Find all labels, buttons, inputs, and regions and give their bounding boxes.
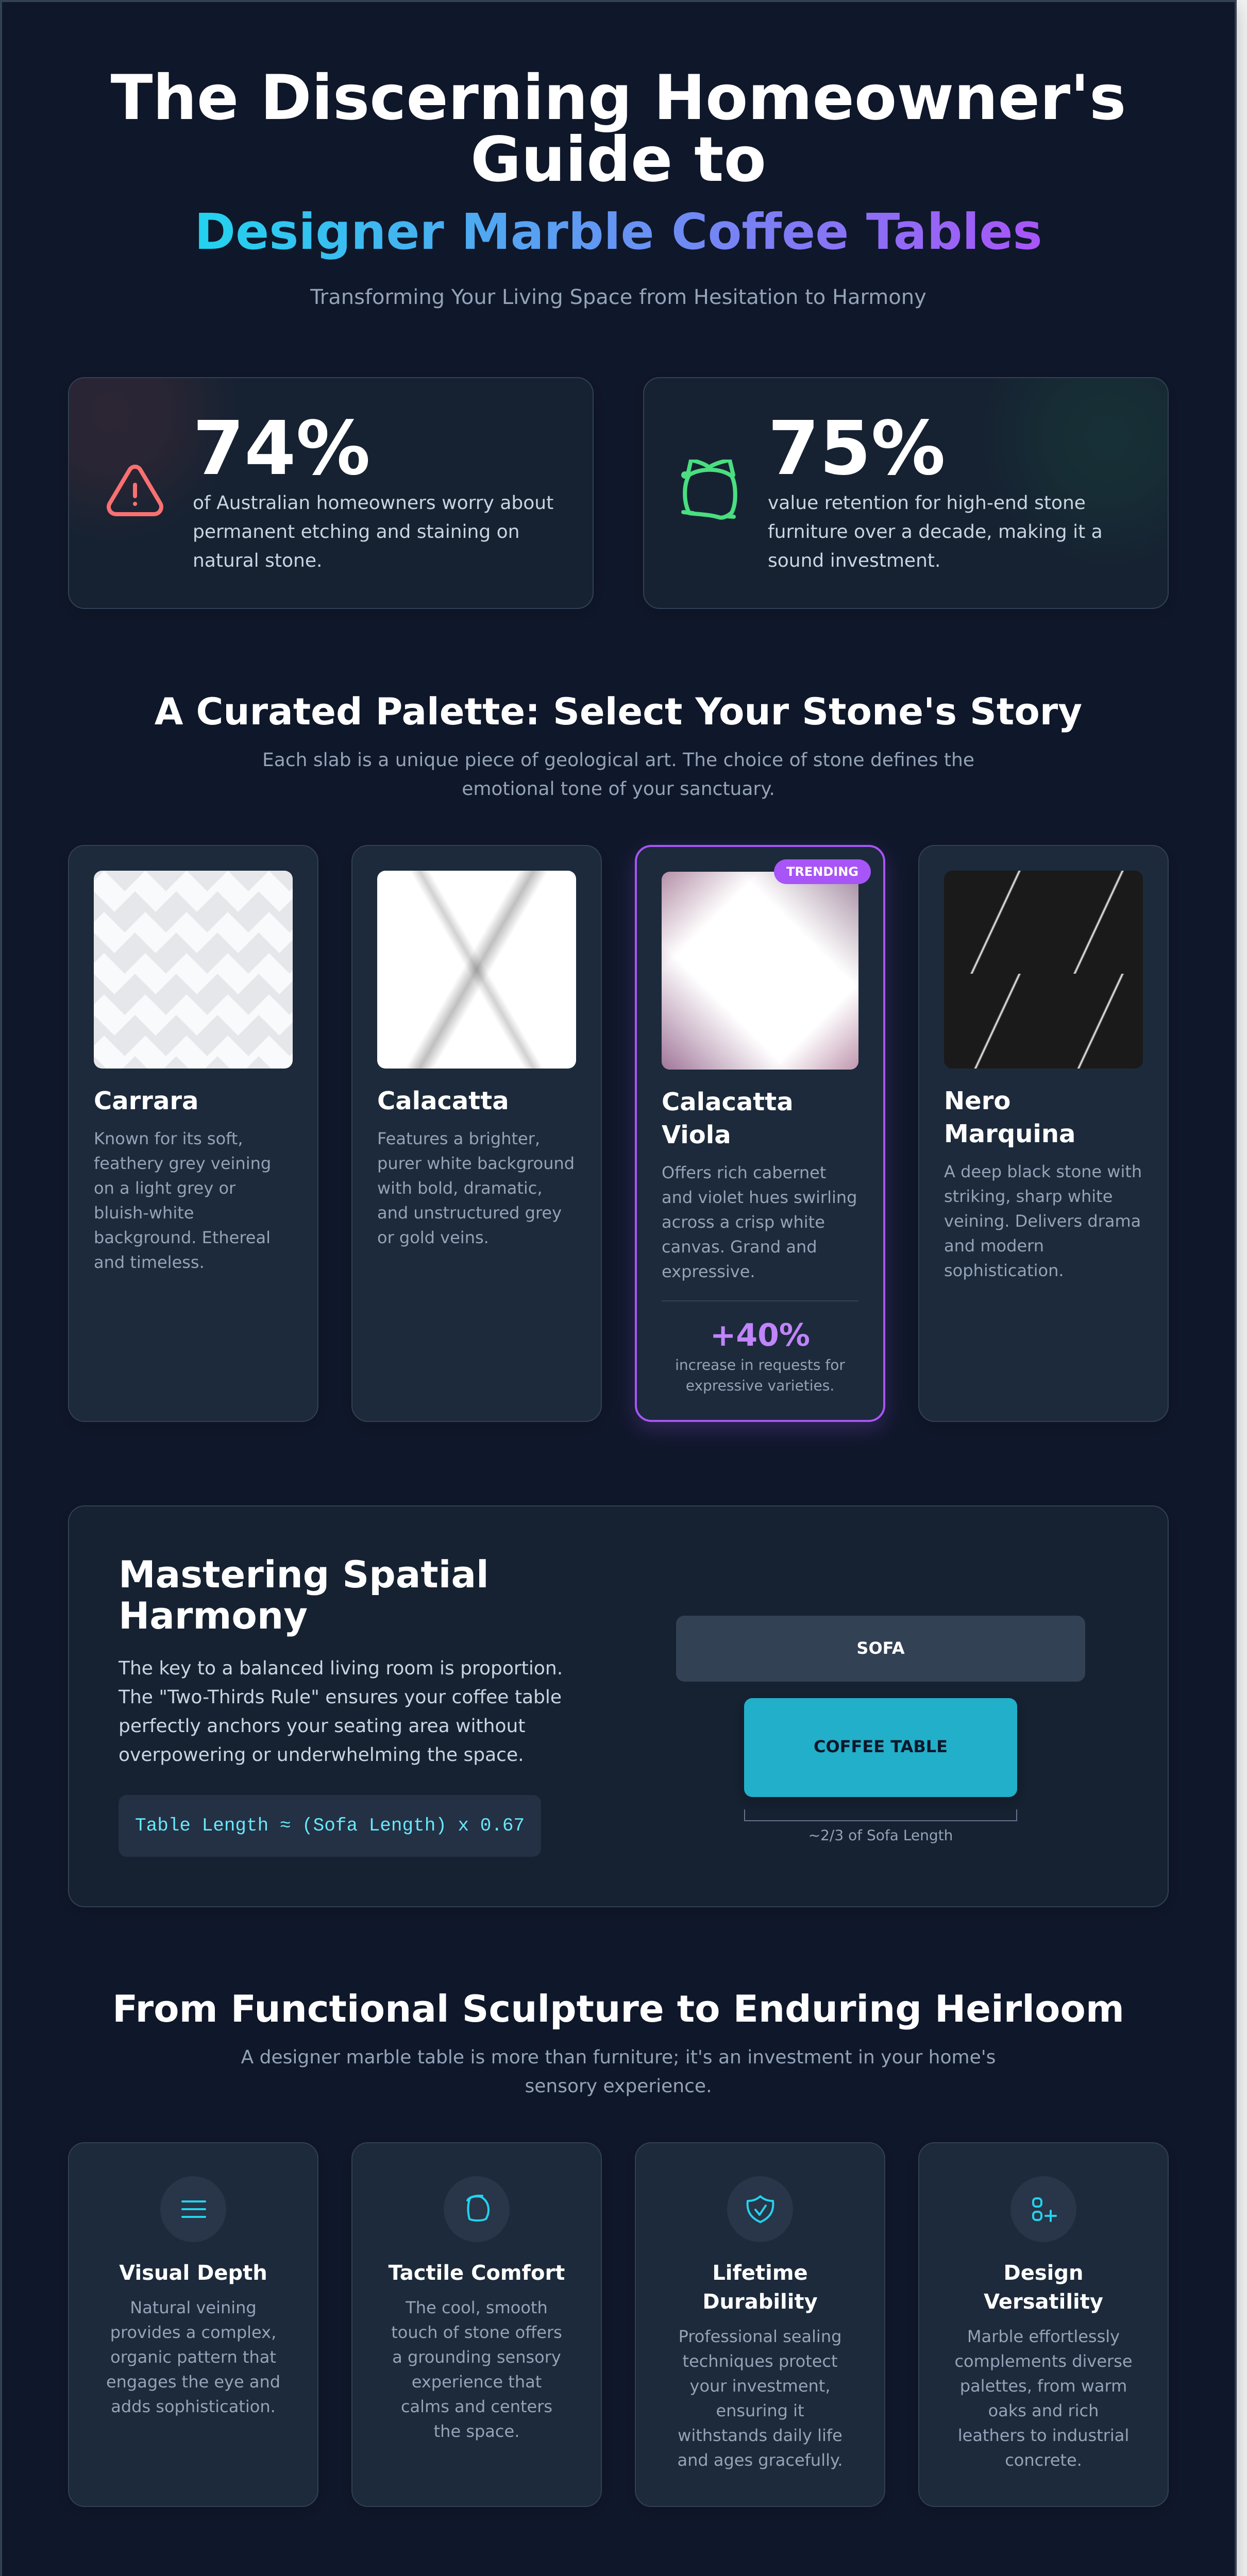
- feature text: your investment,: [689, 2376, 831, 2396]
- feature text: engages the eye and: [106, 2372, 280, 2392]
- stone description: expressive.: [662, 1262, 755, 1281]
- icon: green alarm shape: [683, 460, 735, 518]
- trending badge: TRENDING: [786, 865, 858, 879]
- body text: The "Two-Thirds Rule" ensures your coffee table: [118, 1687, 562, 1708]
- icon: smooth stone: [467, 2196, 488, 2221]
- body text: overpowering or underwhelming the space.: [119, 1744, 524, 1766]
- card background: [635, 2143, 885, 2506]
- stone name: Marquina: [944, 1120, 1075, 1148]
- feature text: Marble effortlessly: [967, 2327, 1120, 2346]
- stat caption: increase in requests for: [675, 1357, 845, 1374]
- feature text: adds sophistication.: [111, 2397, 276, 2416]
- feature text: The cool, smooth: [405, 2298, 548, 2317]
- stone name: Carrara: [94, 1087, 198, 1115]
- stone name: Nero: [944, 1087, 1010, 1115]
- stone name: Viola: [662, 1121, 731, 1149]
- panel: Lifetime Durability: [635, 2143, 885, 2506]
- stone description: A deep black stone with: [944, 1162, 1142, 1181]
- feature text: touch of stone offers: [391, 2323, 562, 2342]
- header: [111, 62, 1126, 309]
- card background with purple highlight: [636, 846, 884, 1421]
- feature text: techniques protect: [682, 2351, 838, 2371]
- feature title: Visual Depth: [119, 2261, 267, 2285]
- stone description: feathery grey veining: [94, 1154, 271, 1173]
- swatch: Nero Marquina: [944, 871, 1143, 1069]
- feature text: oaks and rich: [988, 2401, 1099, 2420]
- stat description: natural stone.: [193, 550, 322, 571]
- gradient subtitle: Designer Marble Coffee Tables: [194, 203, 1042, 261]
- diagram: coffee table: [744, 1698, 1017, 1797]
- panel: 75% statistic: [644, 378, 1168, 608]
- card background: [69, 845, 318, 1421]
- body text: perfectly anchors your seating area without: [119, 1716, 525, 1737]
- heading: Mastering Spatial: [119, 1553, 489, 1596]
- stone description: or gold veins.: [377, 1228, 489, 1247]
- feature text: complements diverse: [954, 2351, 1133, 2371]
- stone description: and violet hues swirling: [662, 1188, 857, 1207]
- diagram: bracket label: ~2/3 of Sofa Length: [808, 1827, 953, 1844]
- stat description: furniture over a decade, making it a: [768, 521, 1103, 543]
- icon circle: [160, 2176, 226, 2242]
- section heading: heirloom: From Functional Sculpture to Enduring Heirloom: [112, 1987, 1124, 2030]
- feature text: provides a complex,: [110, 2323, 276, 2342]
- panel: Nero Marquina: [919, 845, 1168, 1421]
- section intro: heirloom: A designer marble table is more than furniture; it's an investment in your home's: [241, 2047, 996, 2068]
- body text: The key to a balanced living room is proportion.: [118, 1658, 563, 1679]
- stat description: value retention for high-end stone: [768, 493, 1086, 514]
- stone description: canvas. Grand and: [662, 1237, 817, 1257]
- swatch: Calacatta Viola: [662, 872, 858, 1070]
- panel: Calacatta Viola: [636, 846, 884, 1421]
- icon circle: [1010, 2176, 1076, 2242]
- stat number: 74%: [193, 405, 370, 492]
- icon: shield check: [748, 2196, 773, 2222]
- feature text: Professional sealing: [679, 2327, 841, 2346]
- heading: Harmony: [119, 1594, 308, 1637]
- stat description: of Australian homeowners worry about: [193, 493, 553, 514]
- feature title: Durability: [702, 2290, 818, 2314]
- feature text: calms and centers: [401, 2397, 552, 2416]
- stone description: across a crisp white: [662, 1212, 825, 1232]
- panel: Tactile Comfort: [352, 2143, 601, 2506]
- feature title: Versatility: [984, 2290, 1103, 2314]
- stone description: and unstructured grey: [377, 1203, 562, 1223]
- formula box: Table Length ≈ (Sofa Length) x 0.67: [135, 1815, 525, 1836]
- stat caption: expressive varieties.: [686, 1377, 834, 1394]
- card background: [352, 2143, 601, 2506]
- feature text: palettes, from warm: [960, 2376, 1127, 2396]
- feature text: Natural veining: [130, 2298, 257, 2317]
- stat description: sound investment.: [768, 550, 940, 571]
- swatch: Carrara zigzag: [94, 871, 293, 1069]
- icon: warning triangle: [109, 467, 161, 514]
- stone description: Known for its soft,: [94, 1129, 243, 1148]
- diagram: sofa: SOFA: [856, 1638, 905, 1658]
- stone description: sophistication.: [944, 1261, 1064, 1280]
- green corner glow: [644, 378, 1168, 608]
- stone description: bluish-white: [94, 1203, 194, 1223]
- icon circle: [444, 2176, 510, 2242]
- stat: +40%: +40%: [710, 1317, 810, 1353]
- card background: [352, 845, 601, 1421]
- feature text: withstands daily life: [678, 2426, 842, 2445]
- stone description: veining. Delivers drama: [944, 1211, 1141, 1231]
- stone description: with bold, dramatic,: [377, 1178, 543, 1198]
- section intro: palette: emotional tone of your sanctuary.: [462, 778, 775, 800]
- card background: [919, 845, 1168, 1421]
- stone description: and timeless.: [94, 1252, 205, 1272]
- stat number: 75%: [768, 405, 946, 492]
- card background: [644, 378, 1168, 608]
- card background: [69, 378, 593, 608]
- feature text: organic pattern that: [110, 2347, 276, 2367]
- panel: Calacatta: [352, 829, 601, 1421]
- panel: Carrara: [69, 845, 318, 1421]
- title: The Discerning Homeowner's: [111, 62, 1126, 134]
- stone description: on a light grey or: [94, 1178, 236, 1198]
- card background: [69, 2143, 318, 2506]
- stone description: background. Ethereal: [94, 1228, 271, 1247]
- feature text: a grounding sensory: [392, 2347, 561, 2367]
- trending badge: [774, 859, 871, 884]
- swatch: Calacatta crossed veins: [377, 871, 576, 1069]
- feature text: the space.: [434, 2421, 519, 2441]
- panel: Design Versatility: [919, 2143, 1168, 2506]
- section heading: palette: A Curated Palette: Select Your Stone's Story: [155, 690, 1082, 733]
- icon circle: [727, 2176, 793, 2242]
- icon: shapes plus: [1033, 2198, 1056, 2221]
- stone description: Features a brighter,: [377, 1129, 540, 1148]
- stone description: Offers rich cabernet: [662, 1163, 826, 1182]
- feature text: ensuring it: [716, 2401, 804, 2420]
- red corner glow: [69, 378, 593, 608]
- feature text: and ages gracefully.: [677, 2450, 843, 2470]
- feature title: Lifetime: [712, 2261, 808, 2285]
- stone description: striking, sharp white: [944, 1187, 1113, 1206]
- diagram: coffee table: COFFEE TABLE: [814, 1737, 948, 1756]
- feature title: Tactile Comfort: [389, 2261, 565, 2285]
- panel: Visual Depth: [69, 2143, 318, 2506]
- icon: menu lines: [182, 2201, 205, 2217]
- section intro: heirloom: sensory experience.: [525, 2076, 712, 2097]
- feature text: leathers to industrial: [958, 2426, 1129, 2445]
- card background: [919, 2143, 1168, 2506]
- section intro: palette: Each slab is a unique piece of geological art. The choice of stone defines the: [262, 750, 974, 771]
- formula box: [119, 1795, 541, 1857]
- diagram: measurement bracket: [745, 1809, 1017, 1821]
- stone description: purer white background: [377, 1154, 575, 1173]
- feature title: Design: [1004, 2261, 1083, 2285]
- feature text: concrete.: [1005, 2450, 1082, 2470]
- tagline: Transforming Your Living Space from Hesitation to Harmony: [310, 285, 926, 309]
- stone name: Calacatta: [662, 1088, 794, 1116]
- stat description: permanent etching and staining on: [193, 521, 519, 543]
- panel: Mastering Spatial Harmony: [69, 1506, 1168, 1907]
- panel background: [69, 1506, 1168, 1907]
- feature text: experience that: [412, 2372, 542, 2392]
- stone description: and modern: [944, 1236, 1044, 1256]
- diagram: sofa: [676, 1616, 1085, 1682]
- panel: 74% statistic: [69, 378, 593, 608]
- stone name: Calacatta: [377, 1087, 509, 1115]
- title: Guide to: [470, 124, 766, 196]
